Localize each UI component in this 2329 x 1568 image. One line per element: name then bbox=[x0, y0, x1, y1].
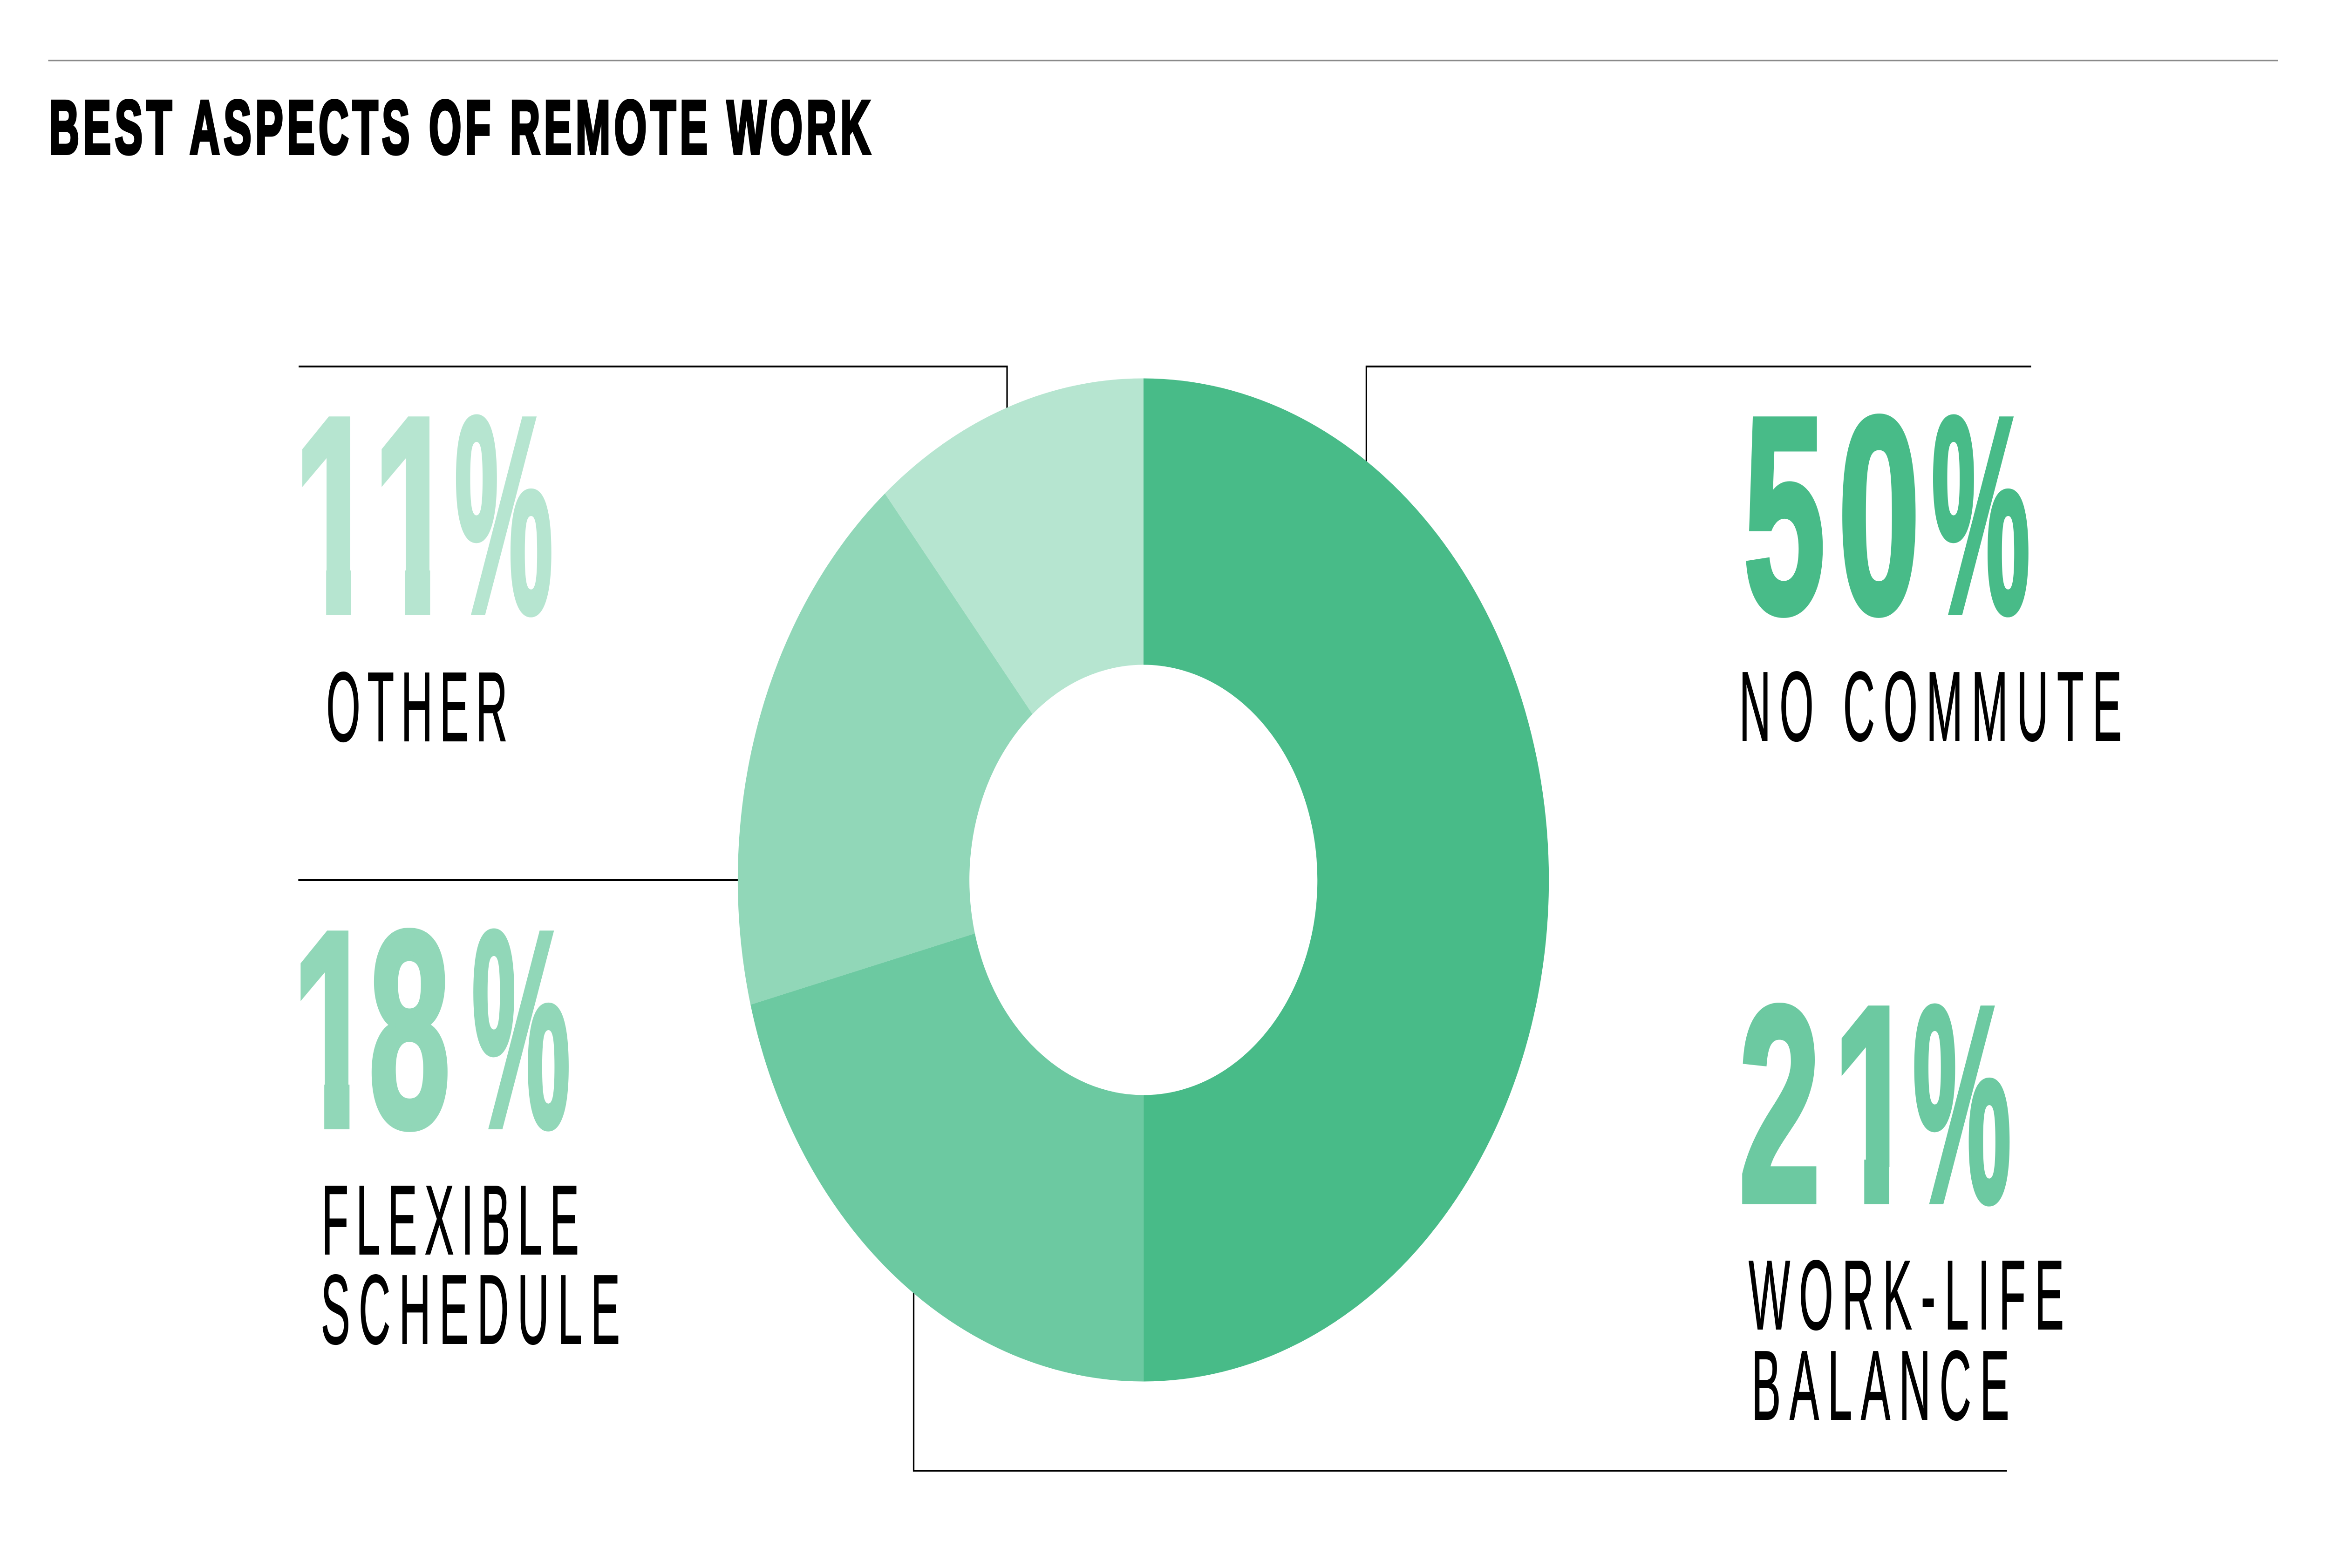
leader line: work-life balance bbox=[914, 1290, 2007, 1471]
title: BEST ASPECTS OF REMOTE WORK bbox=[49, 85, 871, 170]
stat: no commute bbox=[1739, 359, 2122, 761]
value: 18% bbox=[282, 873, 570, 1186]
value: 18%: 1 bbox=[293, 873, 374, 1186]
label: work-life balance bbox=[1749, 1239, 2064, 1440]
value: 11%: % bbox=[455, 359, 553, 672]
value: 18%: 8 bbox=[368, 873, 450, 1186]
stat: other bbox=[282, 359, 553, 762]
segment: flexible schedule 18% bbox=[738, 494, 1033, 1005]
value: 21%: 1 bbox=[1833, 948, 1915, 1261]
donut chart bbox=[738, 378, 1549, 1381]
label: flexible schedule bbox=[321, 1164, 620, 1364]
segment: other 11% bbox=[885, 378, 1144, 714]
label: other: OTHER bbox=[326, 651, 508, 762]
value: 50% bbox=[1743, 359, 2030, 672]
label: work-life balance: BALANCE bbox=[1751, 1330, 2009, 1440]
label: work-life balance: WORK-LIFE bbox=[1749, 1239, 2064, 1350]
value: 21%: % bbox=[1913, 948, 2011, 1261]
stat: flexible schedule bbox=[282, 873, 620, 1364]
value: 21%: 2 bbox=[1739, 948, 1820, 1261]
segment: work-life balance 21% bbox=[750, 933, 1144, 1381]
label: flexible schedule: FLEXIBLE bbox=[322, 1164, 579, 1275]
value: 11%: 11 bbox=[294, 359, 455, 672]
value: 18%: % bbox=[472, 873, 570, 1186]
value: 50%: % bbox=[1932, 359, 2030, 672]
leader line: no commute bbox=[1366, 367, 2031, 470]
label: flexible schedule: SCHEDULE bbox=[321, 1254, 620, 1364]
leader line: other bbox=[299, 367, 1007, 419]
leader line: flexible schedule bbox=[298, 879, 742, 881]
stat: work-life balance bbox=[1739, 948, 2064, 1440]
value: 50%: 50 bbox=[1743, 359, 1920, 672]
value: 21% bbox=[1739, 948, 2011, 1261]
label: no commute: NO COMMUTE bbox=[1739, 651, 2122, 761]
segment: no commute 50% bbox=[1144, 378, 1549, 1381]
value: 11% bbox=[282, 359, 553, 672]
